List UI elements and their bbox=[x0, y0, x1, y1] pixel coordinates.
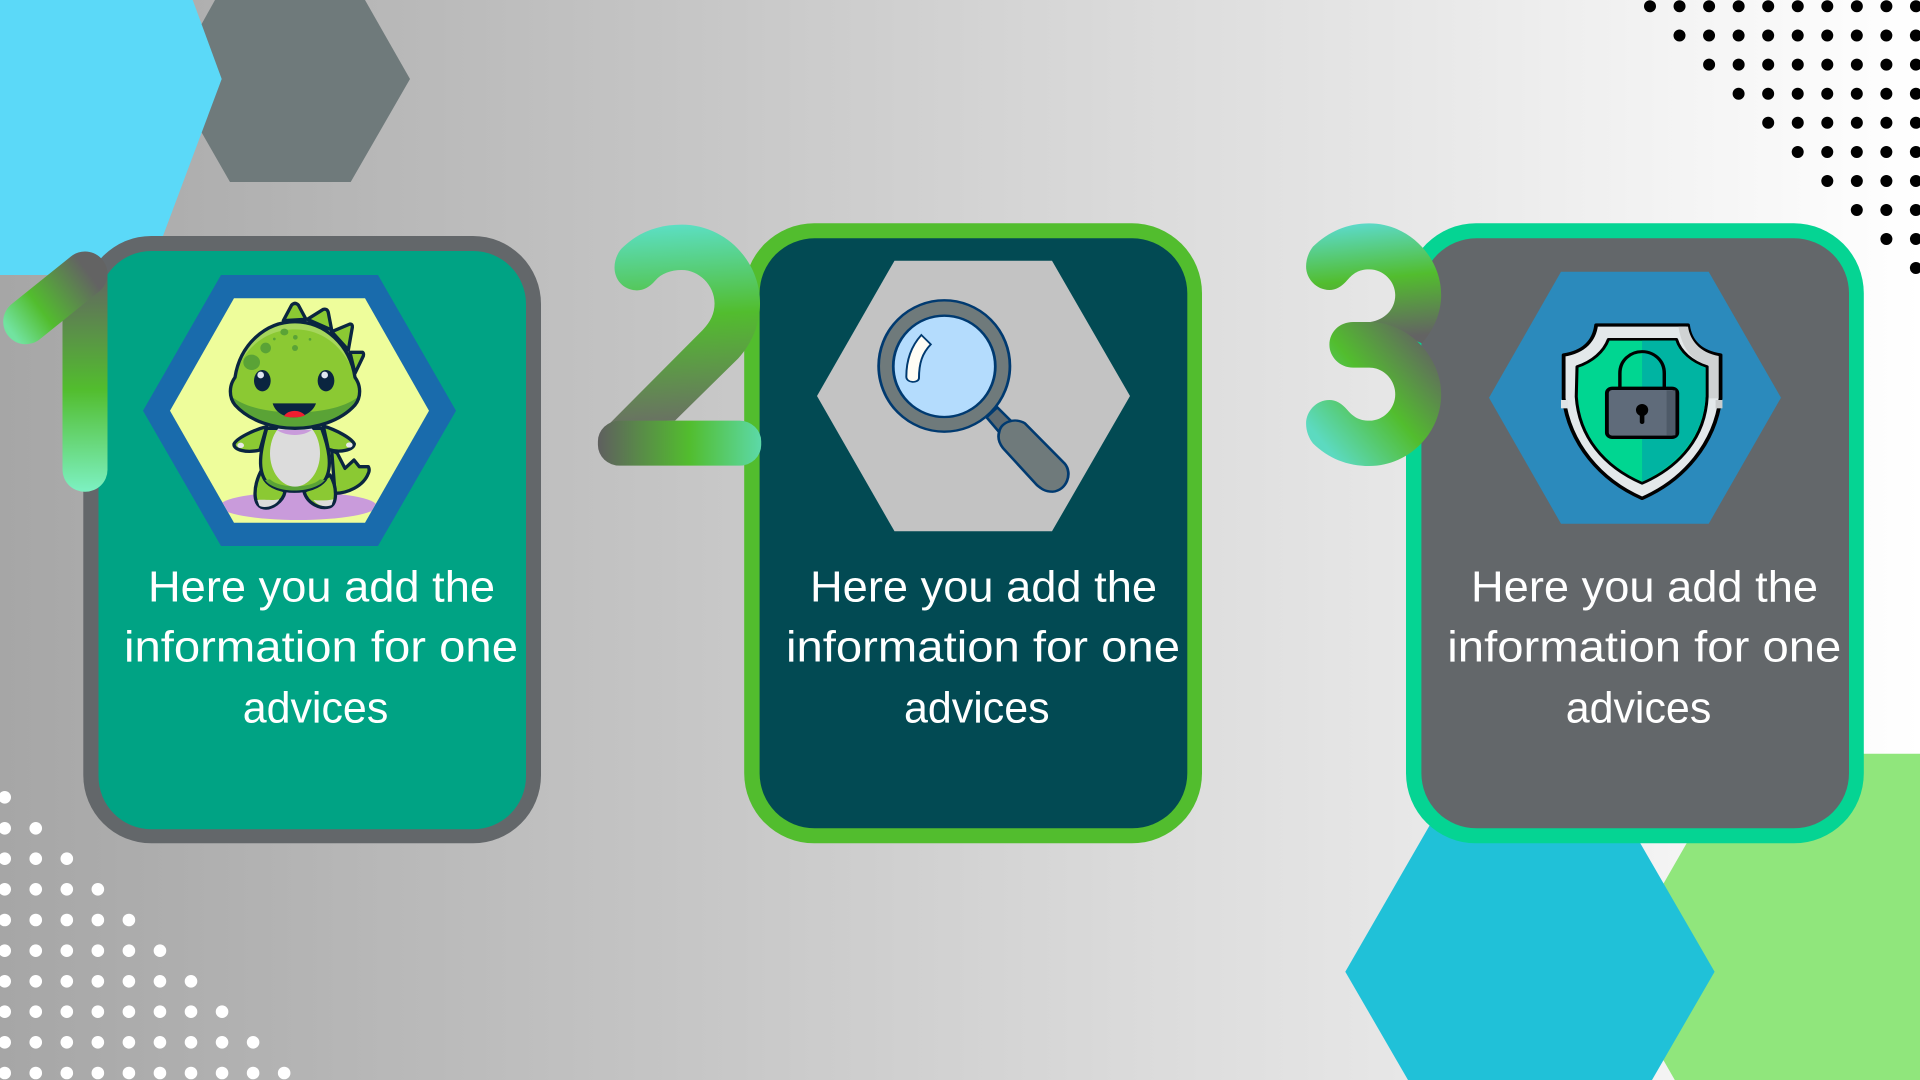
panel: card 2 bbox=[744, 223, 1202, 843]
number 1 bbox=[26, 252, 108, 492]
green hexagon bottom right bbox=[1613, 754, 1920, 1080]
cyan hexagon bottom bbox=[1345, 754, 1715, 1080]
number 2 bbox=[598, 225, 761, 466]
text: card 2 description bbox=[786, 563, 1180, 732]
panel: card 1 bbox=[83, 236, 541, 843]
black dot pattern top right bbox=[1650, 6, 1920, 268]
text: card 1 description: Here you add the bbox=[148, 563, 495, 612]
number 3 bbox=[1306, 223, 1441, 466]
icon: hexagon frame with dinosaur bbox=[143, 275, 456, 546]
text: card 2 description: Here you add the bbox=[810, 563, 1157, 612]
icon: hexagon with security shield bbox=[1489, 272, 1781, 524]
text: card 3 description bbox=[1447, 563, 1841, 732]
text: card 2 description: information for one bbox=[786, 623, 1180, 672]
icon: hexagon with magnifying glass bbox=[817, 261, 1130, 531]
white dot pattern bottom left bbox=[5, 797, 285, 1073]
text: card 3 description: Here you add the bbox=[1471, 563, 1818, 612]
text: card 1 description: advices bbox=[243, 683, 388, 732]
panel: card 3 bbox=[1406, 223, 1864, 843]
text: card 3 description: information for one bbox=[1447, 623, 1841, 672]
text: card 3 description: advices bbox=[1566, 683, 1711, 732]
gray hexagon top left bbox=[171, 0, 410, 182]
text: card 1 description: information for one bbox=[124, 623, 518, 672]
text: card 2 description: advices bbox=[904, 683, 1050, 732]
text: card 1 description bbox=[124, 563, 518, 732]
light blue hexagon top left bbox=[0, 0, 222, 275]
